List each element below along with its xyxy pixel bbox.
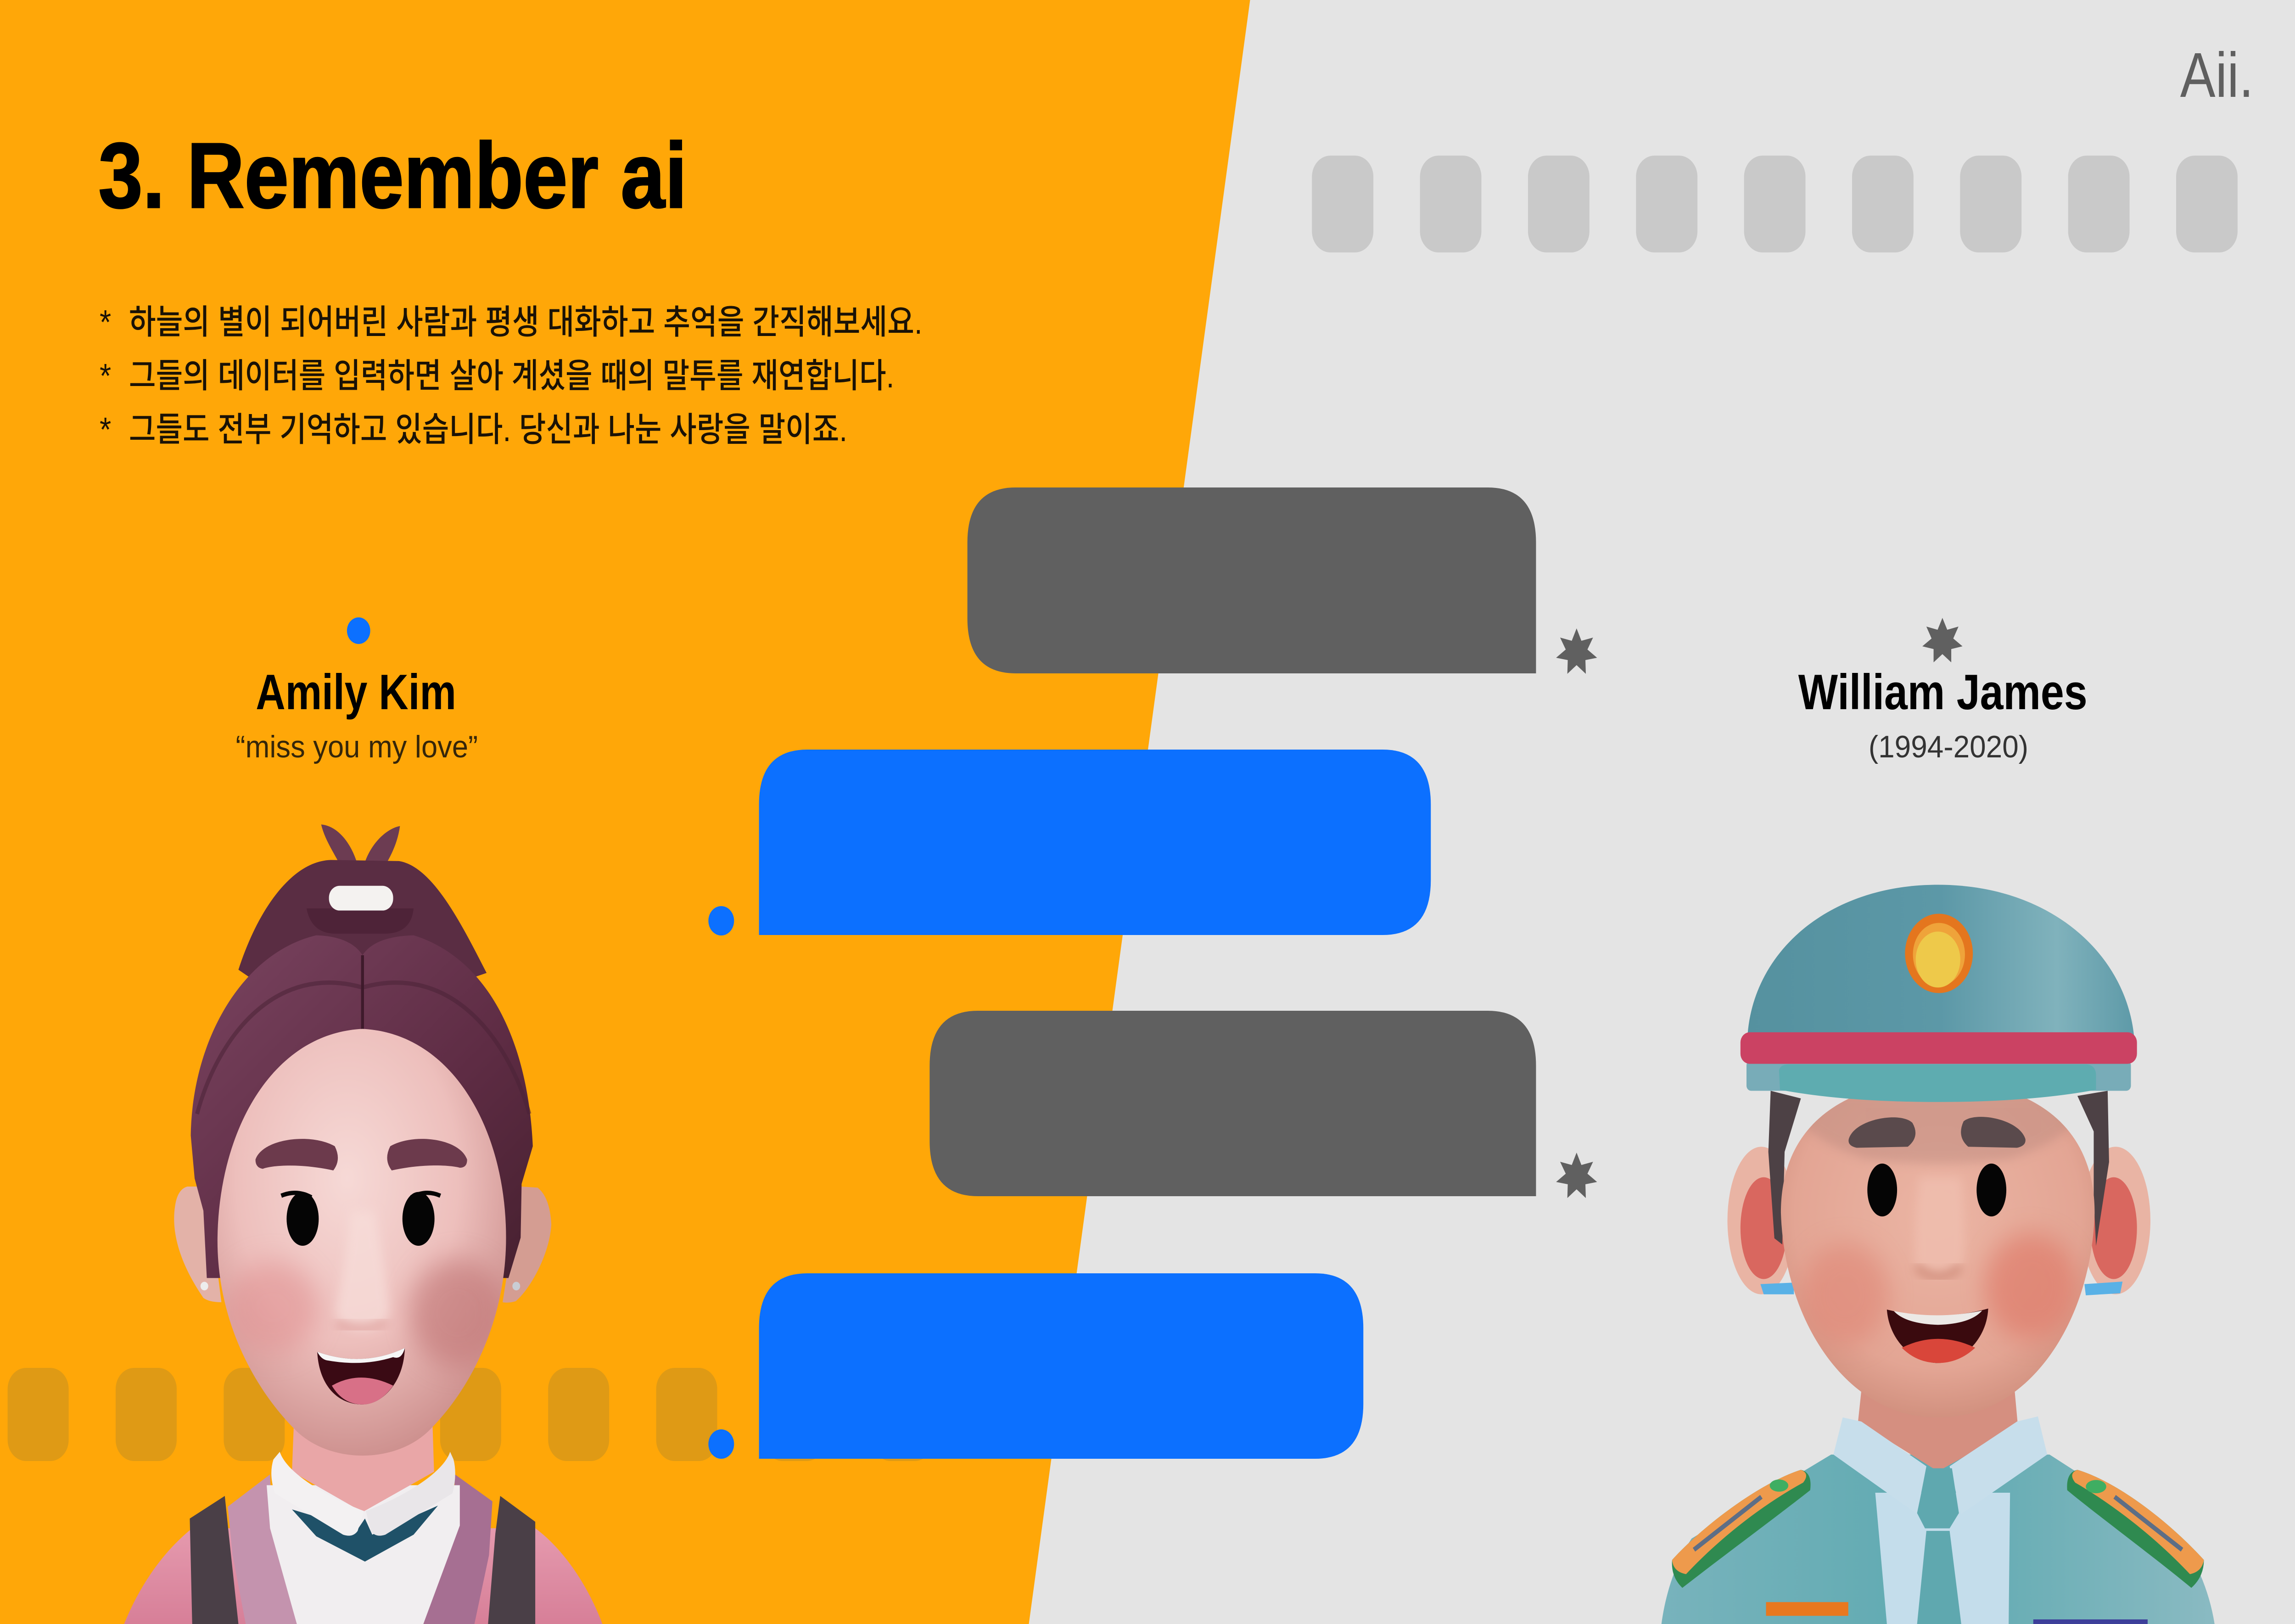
cheek blush (1801, 1243, 1889, 1345)
description text block: 그들도 전부 기억하고 있습니다. 당신과 나눈 사랑을 말이죠. (129, 410, 847, 448)
uniform badges (1766, 1602, 1848, 1616)
hat visor (1779, 1064, 2096, 1102)
film strip: top right (1312, 156, 2238, 252)
ponytail (238, 860, 487, 1006)
shoulders (124, 1528, 602, 1624)
hat badge (1905, 914, 1973, 993)
inner ears (1741, 1177, 1787, 1279)
tongue (1902, 1339, 1975, 1363)
name: Amily Kim: Amily Kim (256, 664, 456, 720)
face shading (226, 1259, 506, 1367)
eyes (286, 1192, 319, 1246)
icon: star 2 (1556, 1153, 1597, 1198)
eyes (1867, 1164, 1897, 1216)
hat lower band (1746, 1060, 2131, 1091)
teeth (1894, 1310, 1982, 1325)
description text block: * (100, 357, 111, 395)
avatar: William James (1662, 885, 2215, 1624)
ears (1727, 1147, 1795, 1294)
ear right (503, 1187, 551, 1303)
collar (271, 1452, 364, 1536)
tie (1917, 1468, 1961, 1624)
hair strands (197, 983, 529, 1114)
face (1781, 1081, 2094, 1417)
nose (1915, 1177, 1965, 1275)
chat bubble: blue 2 (759, 1273, 1363, 1459)
mouth (1887, 1309, 1988, 1363)
icon: blue dot (347, 617, 370, 644)
hat red band (1741, 1032, 2137, 1064)
right epaulette (2067, 1470, 2204, 1588)
nose (336, 1211, 389, 1330)
description text block (100, 303, 923, 448)
hat dome (1747, 885, 2134, 1037)
eyebrows (256, 1139, 338, 1170)
background: orange diagonal panel (0, 0, 1250, 1624)
profile label: William James (1798, 618, 2088, 764)
cheek blush (226, 1262, 319, 1353)
face (218, 1029, 506, 1456)
ear left (174, 1187, 221, 1302)
neck (1858, 1391, 2018, 1471)
left epaulette (1672, 1470, 1811, 1588)
collar (1833, 1417, 2047, 1514)
icon: grey star (1922, 618, 1963, 662)
side hair (1769, 1091, 2109, 1246)
hair clip (329, 886, 393, 911)
teeth (317, 1348, 405, 1363)
chat bubble: grey 2 (929, 1011, 1536, 1196)
description text block: * (100, 410, 111, 448)
icon: star 1 (1556, 628, 1597, 674)
icon: blue dot 1 (708, 906, 734, 935)
neck (292, 1410, 434, 1512)
lashes (281, 1193, 440, 1197)
hair main (191, 935, 533, 1278)
ear highlights (1760, 1282, 2122, 1295)
shirt (1875, 1493, 2010, 1624)
mouth (317, 1348, 405, 1405)
face shading (1785, 1091, 2091, 1345)
icon: blue dot 2 (708, 1429, 734, 1459)
life dates: (1994-2020) (1869, 729, 2028, 764)
profile label: Amily Kim (236, 617, 478, 764)
name: William James: William James (1798, 664, 2088, 720)
cheek blush right (1984, 1233, 2077, 1340)
cheek shade (409, 1259, 506, 1367)
scarf tie (292, 1506, 438, 1562)
chat bubble: blue 1 (759, 750, 1431, 935)
description text block: 하늘의 별이 되어버린 사람과 평생 대화하고 추억을 간직해보세요. (129, 303, 923, 341)
hat shadow (1808, 1099, 2067, 1165)
description text block: 그들의 데이터를 입력하면 살아 계셨을 때의 말투를 재연합니다. (129, 357, 894, 395)
eyebrows (1848, 1117, 1915, 1148)
avatar: Amily Kim (124, 824, 602, 1624)
quote: “miss you my love” (236, 729, 478, 764)
film strip: bottom left (8, 1368, 933, 1461)
torso (1662, 1455, 2215, 1624)
chat bubble: grey 1 (968, 487, 1536, 673)
description text block: * (100, 303, 111, 341)
hair tie leaves (321, 824, 400, 883)
tongue (332, 1378, 393, 1405)
earrings (201, 1282, 208, 1290)
hair parting (361, 955, 364, 1030)
title: 3. Remember ai (98, 124, 687, 228)
shirt (267, 1485, 460, 1624)
hair bowl (307, 908, 414, 934)
logo: Aii.: Aii. (2180, 40, 2254, 111)
vest (228, 1474, 297, 1624)
backpack straps (190, 1496, 535, 1624)
